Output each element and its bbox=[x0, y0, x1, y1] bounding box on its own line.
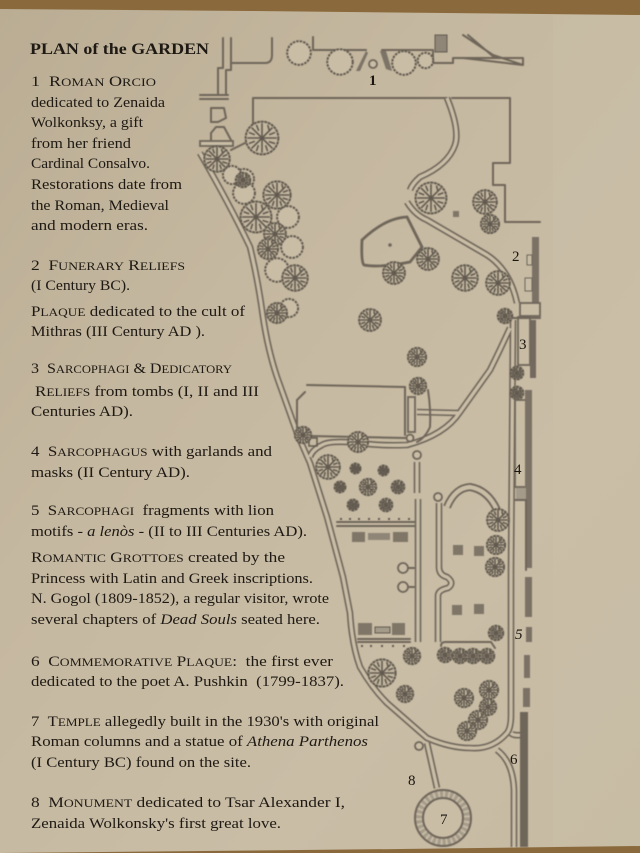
map number labels: 2 bbox=[512, 249, 520, 265]
text block: 3 Sarcophagi and dedicatory reliefs: Centuries AD). bbox=[31, 404, 133, 420]
text block: 2 Funerary reliefs: Mithras (III Century AD ). bbox=[31, 324, 205, 340]
text block: 4 Sarcophagus bbox=[31, 444, 273, 481]
map number labels: 4 bbox=[514, 462, 522, 478]
text block: 3 Sarcophagi and dedicatory reliefs bbox=[31, 361, 259, 420]
structure at label 2 bbox=[520, 237, 540, 316]
text block: 8 Monument bbox=[31, 795, 345, 832]
lower parterre trees and hedge bbox=[316, 451, 421, 542]
map number labels: 1 bbox=[369, 73, 376, 89]
text block: 1 Roman Orcio: dedicated to Zenaida bbox=[31, 95, 165, 111]
text block: 8 Monument: Zenaida Wolkonsky's first great love. bbox=[31, 816, 281, 832]
text block: 1 Roman Orcio bbox=[31, 74, 182, 234]
text block: 5 Sarcophagi fragments and grottoes: N. Gogol (1809-1852), a regular visitor, wrote bbox=[31, 591, 329, 607]
pond bbox=[362, 211, 459, 266]
map number labels: 6 bbox=[510, 752, 518, 768]
text block: 5 Sarcophagi fragments and grottoes: motifs - a lenòs - (II to III Centuries AD). bbox=[31, 524, 307, 540]
grotto structure bbox=[200, 95, 245, 150]
garden map bbox=[200, 35, 540, 847]
enclosure bbox=[297, 385, 430, 446]
map number labels: 3 bbox=[519, 337, 526, 353]
map number labels: 8 bbox=[408, 773, 416, 789]
text block: 1 Roman Orcio: Restorations date from bbox=[31, 177, 182, 193]
scattered trees bbox=[246, 122, 523, 452]
text block: 2 Funerary reliefs: 2 F UNERARY RELIEFS bbox=[31, 258, 185, 274]
text block: 3 Sarcophagi and dedicatory reliefs: 3 SARCOPHAGI & DEDICATORY bbox=[31, 361, 233, 377]
text block: 5 Sarcophagi fragments and grottoes: ROMANTIC GROTTOES created by the bbox=[31, 550, 285, 566]
text block: 5 Sarcophagi fragments and grottoes: Princess with Latin and Greek inscriptions. bbox=[31, 571, 313, 587]
text block: 3 Sarcophagi and dedicatory reliefs: RELIEFS from tombs (I, II and III bbox=[35, 384, 259, 400]
text block: 6 Commemorative plaque: dedicated to the poet A. Pushkin (1799-1837). bbox=[31, 674, 344, 690]
text block: 4 Sarcophagus: 4 S ARCOPHAGUS with garlands and bbox=[31, 444, 273, 460]
text block: 1 Roman Orcio: Wolkonksy, a gift bbox=[31, 115, 144, 131]
grotto arch and south garden bbox=[358, 487, 509, 740]
text block: 2 Funerary reliefs: PLAQUE dedicated to the cult of bbox=[31, 304, 245, 320]
title: PLAN of the GARDEN bbox=[30, 41, 209, 58]
text block: 6 Commemorative plaque bbox=[31, 654, 344, 690]
text block: 5 Sarcophagi fragments and grottoes bbox=[31, 503, 329, 628]
temple circle bbox=[415, 742, 471, 846]
map number labels: 5 bbox=[515, 627, 523, 643]
lawn boundary wall bbox=[253, 98, 540, 222]
text block: 1 Roman Orcio: the Roman, Medieval bbox=[31, 198, 169, 214]
map number labels bbox=[369, 73, 526, 828]
text block: 7 Temple: Roman columns and a statue of Athena Parthenos bbox=[31, 734, 368, 750]
text block: 1 Roman Orcio: and modern eras. bbox=[31, 218, 148, 234]
text block: 2 Funerary reliefs: (I Century BC). bbox=[31, 278, 130, 294]
text block: 7 Temple: 7 TEMPLE allegedly built in the 1930's with original bbox=[31, 714, 379, 730]
text block: 8 Monument: 8 M ONUMENT dedicated to Tsar Alexander I, bbox=[31, 795, 345, 811]
east wall bars bbox=[513, 317, 540, 847]
text block: 6 Commemorative plaque: 6 C OMMEMORATIVE PLAQUE : the first ever bbox=[31, 654, 333, 670]
text block: 1 Roman Orcio: 1 R OMAN O RCIO bbox=[31, 74, 157, 90]
text block: 5 Sarcophagi fragments and grottoes: several chapters of Dead Souls seated here. bbox=[31, 612, 320, 628]
text block: 7 Temple bbox=[31, 714, 379, 771]
text block: 1 Roman Orcio: Cardinal Consalvo. bbox=[31, 156, 150, 172]
text block: 4 Sarcophagus: masks (II Century AD). bbox=[31, 465, 190, 481]
tree cluster along the west path bbox=[204, 146, 308, 323]
top wall and orcio structure bbox=[218, 35, 523, 95]
paths bbox=[200, 98, 522, 847]
text block: 5 Sarcophagi fragments and grottoes: 5 SARCOPHAGI fragments with lion bbox=[31, 503, 275, 519]
text block: 2 Funerary reliefs bbox=[31, 258, 245, 340]
text block: 1 Roman Orcio: from her friend bbox=[31, 136, 132, 152]
text block: 7 Temple: (I Century BC) found on the site. bbox=[31, 755, 251, 771]
map number labels: 7 bbox=[440, 812, 448, 828]
